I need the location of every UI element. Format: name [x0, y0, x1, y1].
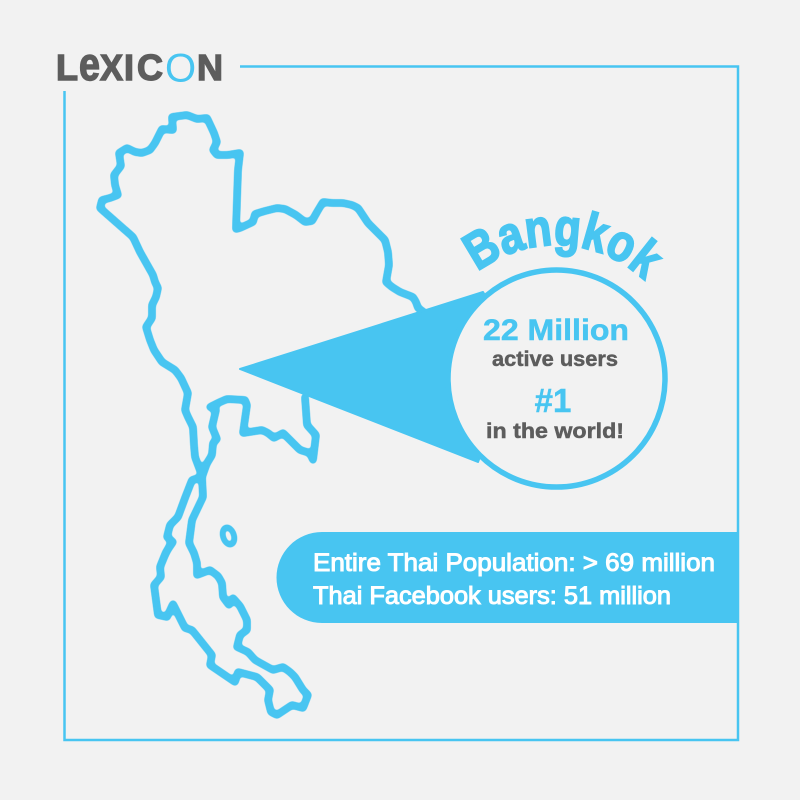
banner text — [313, 549, 715, 610]
callout circle — [448, 270, 665, 487]
callout stats text: 22 Million — [483, 314, 629, 347]
callout stats text — [483, 314, 629, 443]
pointer wedge — [240, 292, 520, 462]
map outline: north-west coast — [100, 115, 240, 473]
logo: Lexicon: L — [56, 47, 78, 88]
banner text: Thai Facebook users: 51 million — [313, 582, 671, 610]
population banner — [276, 532, 738, 623]
map of Thailand — [100, 115, 425, 715]
frame — [64, 66, 738, 740]
logo: Lexicon: N — [197, 47, 223, 88]
logo: Lexicon: I — [124, 47, 134, 88]
callout stats text: active users — [492, 348, 618, 371]
logo: Lexicon: O — [165, 46, 196, 90]
banner text: Entire Thai Population: > 69 million — [313, 549, 715, 577]
callout stats text: in the world! — [486, 420, 624, 443]
map outline: coast thickening — [160, 545, 170, 567]
logo: Lexicon: e — [79, 38, 100, 90]
callout stats text: #1 — [535, 382, 571, 419]
logo: Lexicon — [56, 38, 223, 90]
map outline: north and central — [236, 202, 425, 313]
map outline: southern peninsula — [154, 463, 308, 715]
curved title: Bangkok: Bangkok — [460, 210, 664, 282]
island — [220, 526, 237, 546]
logo: Lexicon: X — [100, 47, 123, 88]
logo: Lexicon: C — [137, 47, 163, 88]
map outline: gulf coast — [201, 397, 316, 473]
